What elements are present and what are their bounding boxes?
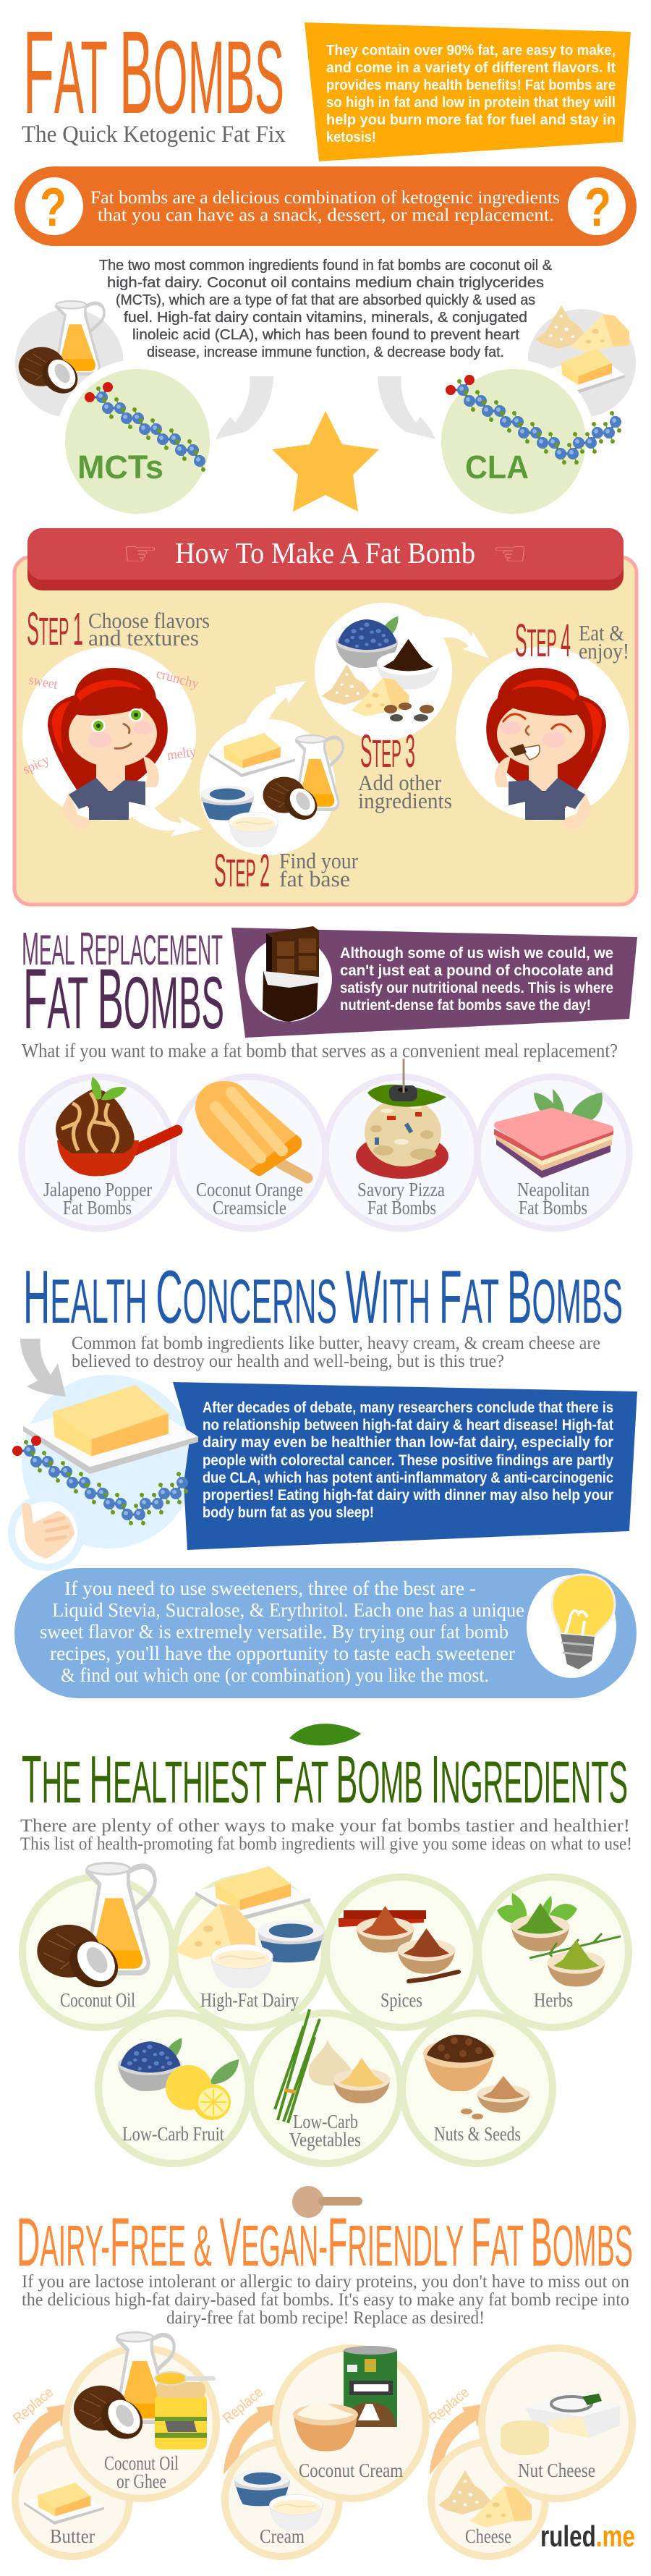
sweeteners text: sweet flavor & is extremely versatile. By trying our fat bomb: [40, 1621, 509, 1643]
item: coconut orange creamsicle: Coconut Orange: [196, 1179, 303, 1200]
item: cheese: [438, 2470, 532, 2547]
panel: blue research text: properties! Eating high-fat dairy with dinner may also help your: [203, 1487, 613, 1504]
definition text: that you can have as a snack, dessert, or meal replacement.: [98, 206, 554, 225]
item: coconut orange creamsicle: Creamsicle: [213, 1197, 286, 1219]
item: savory pizza: Fat Bombs: [367, 1197, 436, 1219]
step 4: enjoy!: [579, 638, 629, 664]
item: butter: [24, 2483, 104, 2547]
panel: replacement pair cheese to nut cheese: [426, 2348, 632, 2556]
panel: replacement pair butter to coconut oil: [10, 2332, 216, 2556]
panel: healthy ingredients: [22, 1863, 629, 2164]
arrow: step 2 to step 3: [243, 681, 306, 728]
icon: question mark right: ?: [584, 177, 611, 237]
CLA circle: [441, 369, 586, 514]
panel: replacement pair cream to coconut cream: [220, 2346, 426, 2556]
step 2: STEP 2: [214, 844, 270, 897]
item: herbs: [497, 1893, 621, 2011]
item: savory pizza: Savory Pizza: [357, 1179, 445, 1200]
paragraph: common ingredients: disease, increase immune function, & decrease body fat.: [147, 344, 504, 360]
item: low-carb fruit: [118, 2038, 239, 2145]
item: savory pizza: [356, 1059, 448, 1219]
item: nuts and seeds: [423, 2035, 529, 2145]
panel: health concerns illustration and text: [12, 1339, 637, 1567]
paragraph: common ingredients: linoleic acid (CLA), which has been found to prevent heart: [132, 326, 519, 343]
icon: coconut oil background: [15, 301, 124, 418]
icon: question mark left: [25, 177, 83, 237]
icon: green leaf: [289, 1724, 361, 1745]
step 1: and textures: [88, 625, 199, 651]
flavor words: sweet: [27, 672, 59, 692]
arrow: step 3 to step 4: [415, 616, 489, 658]
item: coconut oil: [37, 1863, 155, 2011]
paragraph: common ingredients: high-fat dairy. Coconut oil contains medium chain triglycerides: [107, 274, 544, 291]
icon: dairy background: [527, 305, 636, 418]
intro text: provides many health benefits! Fat bombs are: [326, 77, 616, 93]
item: neapolitan: [494, 1089, 613, 1219]
arrow: left to star: [216, 376, 273, 439]
item: coconut orange creamsicle: [195, 1081, 307, 1219]
paragraph: common ingredients: [99, 257, 552, 360]
sweeteners text: & find out which one (or combination) you like the most.: [61, 1664, 489, 1686]
icon: pointing hand left: ☞: [122, 535, 158, 572]
arrow: replace: [220, 2384, 289, 2475]
icon: butter: [23, 1385, 198, 1474]
step 1: STEP 1: [27, 603, 83, 655]
panel: blue research text: [173, 1382, 637, 1550]
item: herbs: Herbs: [534, 1989, 573, 2011]
character: thinking girl: [48, 668, 168, 829]
icon: MCT molecule: [85, 382, 205, 472]
heading banner: [27, 528, 624, 590]
item: spices: [339, 1906, 459, 2011]
icon: fat base ingredients: [201, 733, 343, 847]
paragraph: common ingredients: fuel. High-fat dairy contain vitamins, minerals, & conjugated: [124, 309, 527, 326]
paragraph: common ingredients: The two most common ingredients found in fat bombs are coconut oil &: [99, 257, 552, 274]
text: common ingredients question: [72, 1334, 600, 1371]
item: neapolitan: Neapolitan: [517, 1179, 590, 1200]
MCTs circle: [65, 369, 210, 514]
panel: blue research text: dairy may even be healthier than low-fat dairy, especially for: [203, 1434, 613, 1451]
step 4: STEP 4: [515, 614, 571, 666]
panel: blue research text: people with colorectal cancer. These positive findings are partly: [203, 1452, 613, 1469]
text: dairy-free intro: dairy-free fat bomb recipe! Replace as desired!: [166, 2308, 485, 2328]
definition text: Fat bombs are a delicious combination of ketogenic ingredients: [90, 188, 560, 208]
arrow: replace: Replace: [220, 2384, 266, 2427]
panel: purple callout: [231, 926, 637, 1038]
icon: CLA molecule: [446, 375, 621, 465]
item: coconut cream: [293, 2346, 403, 2481]
item: low-carb fruit: Low-Carb Fruit: [122, 2123, 224, 2145]
heading: meal replacement: [22, 923, 224, 1047]
icon: question mark right: [568, 177, 626, 237]
arrow: step 1 to step 2: [133, 807, 203, 836]
panel: meal replacement recipes: [22, 1059, 629, 1229]
step 1: Choose flavors: [88, 608, 210, 633]
item: low-carb vegetables: [275, 2009, 390, 2151]
MCTs circle: MCTs: [77, 449, 163, 486]
definition text: [90, 188, 560, 225]
item: cream: [234, 2470, 323, 2547]
sweeteners text: recipes, you'll have the opportunity to taste each sweetener: [50, 1643, 515, 1664]
heading: meal replacement: FAT BOMBS: [23, 952, 224, 1047]
item: coconut oil or ghee: Coconut Oil: [104, 2452, 179, 2474]
step 4: [456, 614, 629, 829]
intro text: and come in a variety of different flavors. It: [326, 59, 616, 76]
arrow: grey down arrow: [20, 1339, 66, 1397]
item: low-carb vegetables: Low-Carb: [293, 2111, 358, 2132]
logo: ruled.me: ruled.me: [540, 2520, 635, 2553]
item: coconut oil or ghee: [74, 2332, 216, 2492]
heading banner: How To Make A Fat Bomb: [175, 536, 475, 569]
text: ingredient intro: [20, 1816, 632, 1854]
title: Fat Bombs: FAT BOMBS: [23, 6, 284, 138]
step 3: [315, 603, 452, 813]
step 2: fat base: [279, 866, 350, 891]
item: jalapeno popper: [43, 1077, 177, 1219]
flavor words: spicy: [20, 752, 52, 778]
icon: spoon: [292, 2186, 362, 2218]
item: coconut oil: Coconut Oil: [60, 1989, 135, 2011]
text: dairy-free intro: [22, 2272, 629, 2328]
text: common ingredients question: believed to destroy our health and well-being, but is this true?: [72, 1352, 504, 1371]
panel: blue research text: no relationship between high-fat dairy & heart disease! High-fat: [203, 1417, 613, 1433]
callout text: nutrient-dense fat bombs save the day!: [340, 997, 591, 1014]
text: dairy-free intro: If you are lactose intolerant or allergic to dairy proteins, you don't have to miss out on: [22, 2272, 629, 2292]
callout text: can't just eat a pound of chocolate and: [340, 962, 613, 979]
panel: MCTs and CLA: [15, 257, 636, 523]
icon: thumbs up: [12, 1498, 81, 1567]
item: cream: Cream: [260, 2525, 305, 2547]
arrow: replace: [10, 2384, 79, 2475]
panel: definition pill: [14, 166, 637, 246]
flavor words: crunchy: [155, 666, 201, 692]
callout text: Although some of us wish we could, we: [340, 945, 613, 962]
item: high-fat dairy: High-Fat Dairy: [200, 1989, 299, 2011]
step 2: Find your: [279, 848, 359, 873]
item: coconut cream: Coconut Cream: [299, 2460, 403, 2481]
panel: intro orange callout: [305, 22, 631, 161]
item: jalapeno popper: Fat Bombs: [63, 1197, 132, 1219]
arrow: replace: [426, 2384, 495, 2475]
step 1: [20, 603, 210, 829]
intro text: They contain over 90% fat, are easy to make,: [326, 42, 616, 59]
icon: other ingredients: [322, 616, 440, 721]
item: nut cheese: [501, 2389, 620, 2481]
icon: question mark left: ?: [40, 177, 67, 237]
item: low-carb vegetables: Vegetables: [289, 2129, 361, 2151]
intro text: so high in fat and low in protein that they will: [326, 94, 616, 111]
step 3: ingredients: [358, 788, 452, 813]
flavor words: [20, 666, 201, 778]
item: cheese: Cheese: [465, 2525, 511, 2547]
sweeteners text: [40, 1577, 524, 1686]
text: dairy-free intro: the delicious high-fat dairy-based fat bombs. It's easy to make any fat bomb recipe into: [22, 2290, 629, 2310]
step 3: Add other: [358, 770, 442, 795]
arrow: replace: Replace: [426, 2384, 472, 2427]
arrow: replace: Replace: [10, 2384, 56, 2427]
panel: how to make a fat bomb: [14, 528, 637, 904]
item: coconut oil or ghee: or Ghee: [116, 2470, 166, 2492]
callout text: [340, 945, 613, 1014]
text: common ingredients question: Common fat bomb ingredients like butter, heavy cream, & cream cheese are: [72, 1334, 600, 1353]
subtitle: The Quick Ketogenic Fat Fix: [22, 122, 286, 148]
arrow: right to star: [378, 376, 435, 439]
item: nut cheese: Nut Cheese: [518, 2460, 595, 2481]
sweeteners text: If you need to use sweeteners, three of the best are -: [64, 1577, 476, 1599]
item: spices: Spices: [380, 1989, 422, 2011]
icon: star: [272, 411, 379, 512]
item: jalapeno popper: Jalapeno Popper: [43, 1179, 152, 1200]
icon: CLA molecule: [12, 1436, 188, 1525]
intro text: ketosis!: [326, 129, 376, 145]
item: nuts and seeds: Nuts & Seeds: [434, 2123, 521, 2145]
step 2: [200, 719, 359, 897]
sweeteners text: Liquid Stevia, Sucralose, & Erythritol. Each one has a unique: [52, 1599, 524, 1621]
item: butter: Butter: [50, 2525, 95, 2547]
paragraph: common ingredients: (MCTs), which are a type of fat that are absorbed quickly & used as: [116, 292, 535, 308]
callout text: satisfy our nutritional needs. This is where: [340, 980, 613, 996]
icon: pointing hand right: ☜: [492, 535, 528, 572]
CLA circle: CLA: [465, 449, 529, 486]
step 4: Eat &: [579, 620, 624, 645]
text: ingredient intro: There are plenty of other ways to make your fat bombs tastier and healthier!: [20, 1816, 630, 1836]
flavor words: melty: [166, 745, 197, 763]
character: happy girl eating: [486, 668, 606, 829]
icon: coconut: [19, 347, 84, 397]
icon: light bulb: [527, 1575, 616, 1678]
item: neapolitan: Fat Bombs: [519, 1197, 587, 1219]
panel: blue research text: body burn fat as you sleep!: [203, 1504, 374, 1521]
intro text: [326, 42, 616, 145]
heading: meal replacement: MEAL REPLACEMENT: [22, 923, 223, 975]
panel: sweeteners: [14, 1568, 637, 1698]
step 3: STEP 3: [360, 725, 415, 777]
icon: chocolate bar: [263, 926, 319, 1022]
intro text: help you burn more fat for fuel and stay in: [326, 111, 616, 128]
item: high-fat dairy: [174, 1866, 324, 2011]
